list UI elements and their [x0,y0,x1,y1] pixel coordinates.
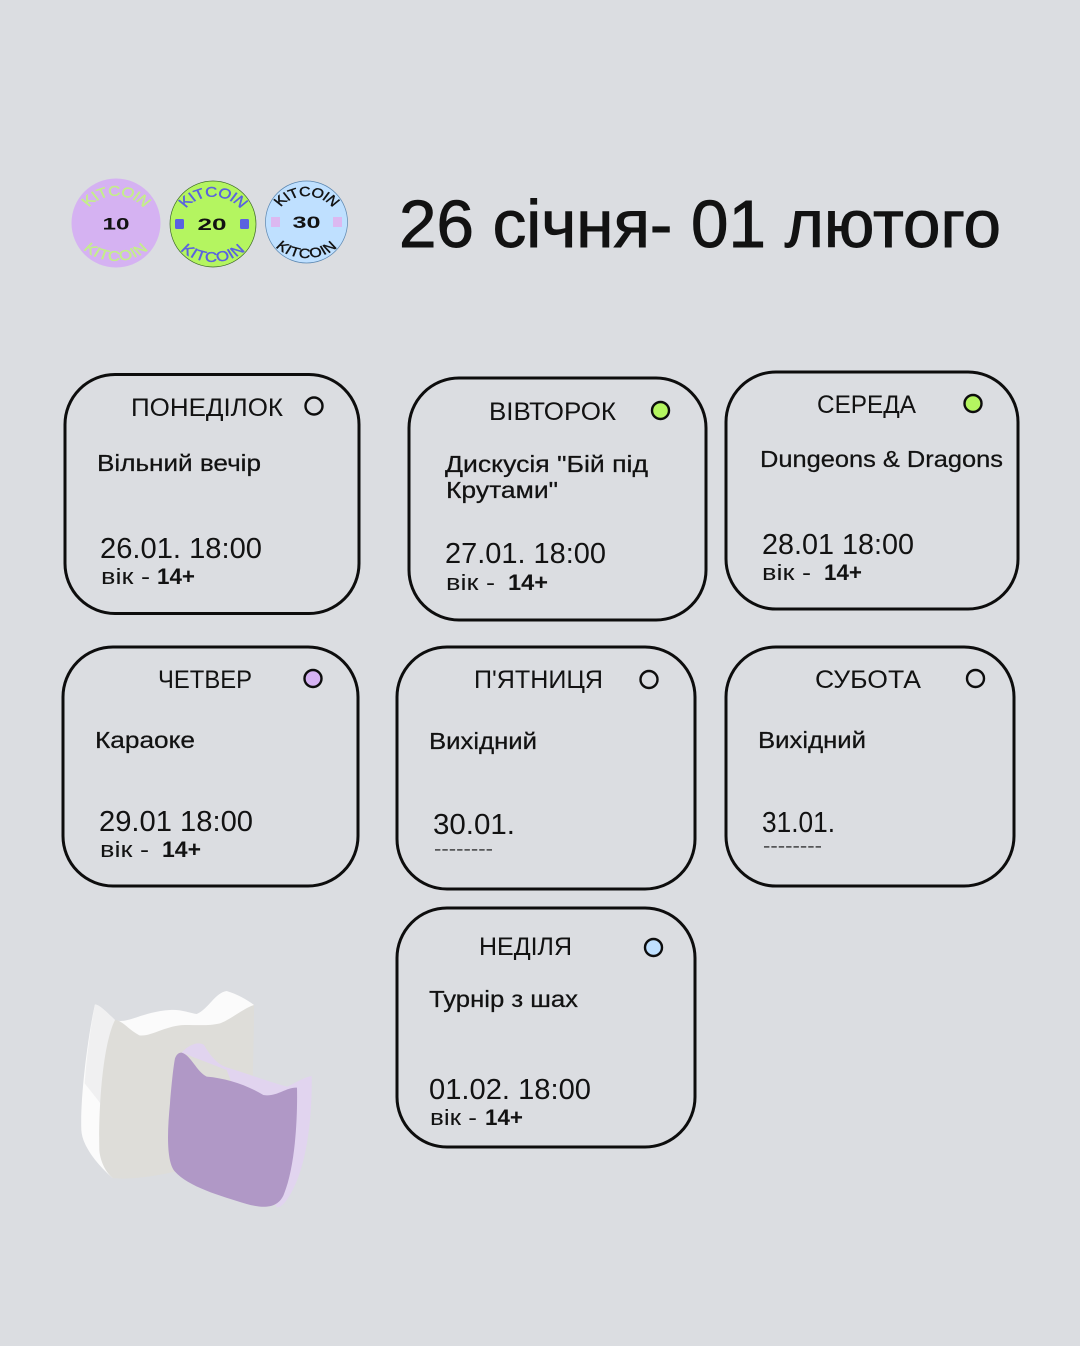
panel: Friday: П'ЯТНИЦЯ [474,666,603,694]
panel: Friday: 30.01. [433,809,515,841]
panel: Sunday: Турнір з шах [429,986,579,1012]
panel: Monday: 26.01. 18:00 [100,533,262,565]
panel: Tuesday: Крутами" [446,477,558,503]
panel: Tuesday: 27.01. 18:00 [445,538,606,570]
panel: Thursday: ЧЕТВЕР [158,666,252,694]
panel: Thursday [63,647,358,886]
panel: Saturday: Вихідний [758,727,866,753]
panel: Wednesday: Dungeons & Dragons [760,446,1003,472]
panel: Saturday [726,647,1014,886]
panel: Thursday: вік - [100,837,149,862]
panel: Sunday: 01.02. 18:00 [429,1074,591,1106]
panel: Thursday: 29.01 18:00 [99,806,253,838]
badge: KITCOIN 30: KITCOIN [273,186,340,207]
panel: Tuesday: ВІВТОРОК [489,398,616,426]
panel: Tuesday [409,378,706,620]
panel: Saturday: -------- [763,838,822,855]
panel: Sunday: 14+ [485,1105,523,1130]
panel: Friday: Вихідний [429,728,537,754]
panel: Saturday: 31.01. [762,807,835,839]
panel: Wednesday: СЕРЕДА [817,391,916,419]
panel: Wednesday [726,372,1018,609]
panel: Sunday: НЕДІЛЯ [479,933,572,961]
badge: KITCOIN 20: KITCOIN [178,186,248,208]
badge: KITCOIN 20: 20 [198,215,226,234]
panel: Thursday: 14+ [162,837,201,862]
panel: Saturday: СУБОТА [815,666,921,694]
badge: KITCOIN 10 [72,178,160,268]
illustration: white and purple cat-ear blocks [81,991,312,1207]
panel: Wednesday: 28.01 18:00 [762,529,914,561]
panel: Monday: ПОНЕДІЛОК [131,394,283,422]
panel: Thursday: Караоке [95,727,195,753]
panel: Monday: Вільний вечір [97,450,261,476]
badge: KITCOIN 10: KITCOIN [81,186,152,208]
panel: Friday: -------- [434,841,493,858]
panel: Friday [397,647,695,889]
panel: Wednesday: вік - [762,560,811,585]
panel: Sunday: вік - [430,1105,477,1130]
badge: KITCOIN 10: 10 [102,214,130,234]
badge: KITCOIN 30: KITCOIN [276,240,337,258]
panel: Monday [65,374,359,614]
panel: Monday: вік - [101,564,150,589]
badge: KITCOIN 20 [170,180,256,268]
panel: Tuesday: Дискусія "Бій під [445,451,649,477]
badge: KITCOIN 10: KITCOIN [84,242,148,262]
badge: KITCOIN 30: 30 [292,213,320,232]
badge: KITCOIN 30 [265,180,348,264]
panel: Sunday [397,908,695,1147]
panel: Monday: 14+ [157,564,195,589]
panel: Tuesday: 14+ [508,570,548,595]
title: 26 січня- 01 лютого [399,187,1001,262]
badge: KITCOIN 20: KITCOIN [180,243,245,262]
panel: Tuesday: вік - [446,570,495,595]
panel: Wednesday: 14+ [824,560,862,585]
